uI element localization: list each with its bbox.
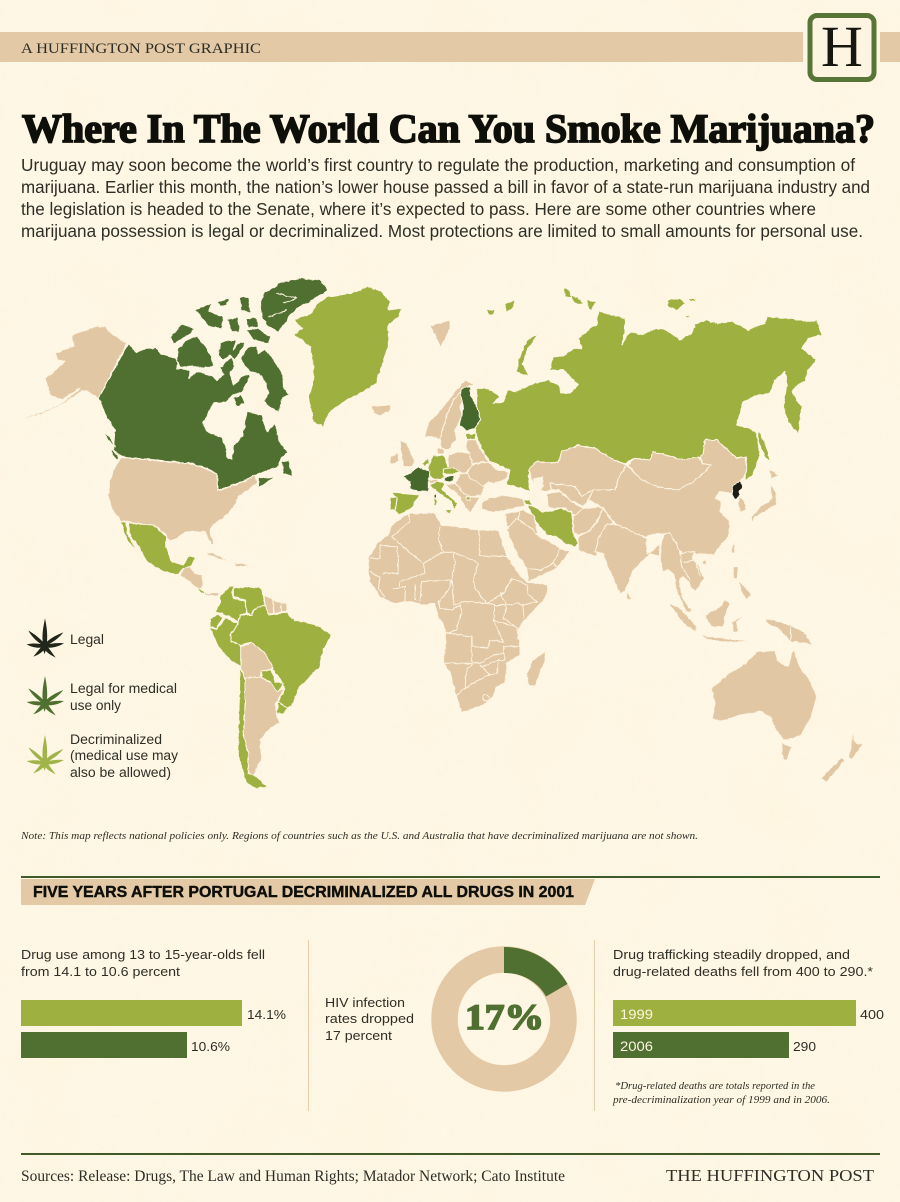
legend label: medical [70,681,177,713]
europe and middle east [390,433,538,535]
ukraine [467,462,508,487]
china [588,440,747,555]
hiv text [325,995,414,1043]
java [697,634,752,643]
argentina [243,677,285,776]
new zealand [848,731,862,760]
sri lanka [626,592,632,601]
france [403,467,430,492]
bolivia [241,643,273,678]
madagascar [527,651,546,686]
footnote: pre-decriminalization year of 1999 and in 2006. [612,1094,830,1106]
peru [209,618,242,667]
section heading [21,876,880,905]
lesotho border [483,694,489,701]
arabia [507,518,570,582]
bar chart: drug use: 14.1% [247,1007,286,1022]
balkans [445,483,480,513]
sakhalin [758,430,771,462]
hiv text: 17 percent [325,1028,392,1043]
india [595,524,660,594]
footer: Sources: Release: Drugs, The Law and Human Rights; Matador Network; Cato Institute [21,1168,565,1185]
footer: THE HUFFINGTON POST [666,1166,875,1185]
usa [108,457,257,545]
panel: drug use [21,947,286,1058]
alaska [17,327,127,422]
taiwan [731,543,735,553]
legend label: decriminalized: (medical use may [70,748,178,763]
caspian sea [528,477,550,512]
legend label: decriminalized [70,732,178,780]
bar chart: deaths [613,1000,884,1058]
uruguay [277,702,287,715]
footer [21,1153,880,1185]
tasmania [782,743,792,760]
borneo [705,599,730,627]
south asia and oceania [595,524,862,782]
drug use text: from 14.1 to 10.6 percent [21,964,180,979]
bar chart: drug use [21,1000,286,1058]
mexico [121,521,196,575]
uk and ireland [400,440,415,467]
colombia [215,585,247,622]
greenland [293,287,402,427]
footnote: *Drug-related deaths are totals reported in the [615,1080,815,1092]
intro text [21,155,870,241]
chile [238,667,267,788]
sweden [440,390,465,450]
intro text: Uruguay may soon become the world’s first country to regulate the production, marketing and consumption of [21,155,855,175]
iraq and syria [505,510,538,535]
section heading: FIVE YEARS AFTER PORTUGAL DECRIMINALIZED ALL DRUGS IN 2001 [33,884,574,901]
donut chart: 17% [465,997,544,1037]
central america [180,567,220,596]
kazakhstan [528,445,627,497]
germany [428,455,448,479]
arctic islands [487,288,697,377]
hiv text: rates dropped [325,1011,414,1026]
svalbard [430,320,450,347]
mexico, central and south america [121,521,332,788]
baltics and belarus [466,439,488,463]
afghanistan [573,507,603,535]
new guinea [765,618,813,645]
caucasus [523,500,533,505]
guianas [264,595,287,613]
ecuador [210,614,223,628]
legend label: legal: Legal [70,632,104,647]
southeast asia [660,533,704,613]
russia [475,312,822,492]
drug use text: Drug use among 13 to 15-year-olds fell [21,947,265,962]
icon: leaf decriminalized [27,735,64,774]
legend label: decriminalized: also be allowed) [70,765,171,780]
intro text: marijuana possession is legal or decriminalized. Most protections are limited to small amounts for personal use. [21,221,863,241]
north america [17,278,475,545]
benelux [422,458,429,467]
albania [465,497,471,500]
spain [392,493,420,515]
icon: Huffington Post H logo [810,14,874,80]
bar chart: deaths: 1999 [620,1007,653,1022]
footnote [612,1080,830,1106]
estonia [466,433,476,439]
icon: leaf legal [27,618,64,658]
brazil [231,606,332,708]
donut chart [444,947,568,1078]
intro text: the legislation is headed to the Senate, where it’s expected to pass. Here are some other countries where [21,199,816,219]
drug use text [21,947,265,979]
intro text: marijuana. Earlier this month, the nation’s lower house passed a bill in favor of a state-run marijuana industry and [21,177,870,197]
denmark [437,448,443,454]
panel: drug trafficking [612,947,884,1106]
canada [98,278,328,490]
iran [527,505,578,547]
romania and hungary [455,473,485,497]
trafficking text: Drug trafficking steadily dropped, and [613,947,850,962]
bar chart: deaths: 400 [860,1007,884,1022]
hainan [702,560,707,565]
turkey [482,496,525,512]
czech republic [443,467,460,474]
world map [17,278,862,788]
trafficking text [613,947,873,979]
africa [368,513,548,713]
bar chart: deaths: 290 [793,1039,816,1054]
portugal [390,497,397,511]
trafficking text: drug-related deaths fell from 400 to 290.* [613,964,873,979]
african borders [370,513,537,695]
poland [448,452,472,473]
hiv text: HIV infection [325,995,405,1010]
legend label: medical: Legal for medical [70,681,177,696]
australia [712,648,817,740]
legend label: decriminalized: Decriminalized [70,732,162,747]
philippines [733,567,738,578]
pakistan [578,508,613,557]
panel: hiv [325,947,568,1078]
finland [459,387,481,431]
africa and arabia [368,513,570,713]
bar chart: deaths: 2006 [620,1039,653,1054]
norway [425,381,475,440]
south korea [737,496,747,512]
caribbean islands [203,552,230,562]
north korea [732,481,743,499]
legend label: medical: use only [70,698,121,713]
paraguay [262,670,283,692]
venezuela [233,587,265,615]
italy [429,482,458,510]
sumatra [668,603,697,632]
switzerland and slovenia [428,479,438,483]
icon: leaf medical [27,676,64,715]
mongolia [628,452,712,490]
map note: Note: This map reflects national policies only. Regions of countries such as the U.S. and Australia that have decriminalized marijuana are not shown. [20,830,698,842]
icon: Huffington Post H logo: H [821,14,863,79]
japan [752,483,777,523]
header band [0,32,900,62]
iceland [372,405,392,416]
bar chart: drug use: 10.6% [191,1039,230,1054]
central asia [550,483,593,507]
austria [444,475,454,482]
header band: A HUFFINGTON POST GRAPHIC [21,41,261,57]
sulawesi [732,614,747,632]
title: Where In The World Can You Smoke Marijuana? [22,106,875,151]
legend [27,618,178,780]
russia and asia [459,288,822,557]
